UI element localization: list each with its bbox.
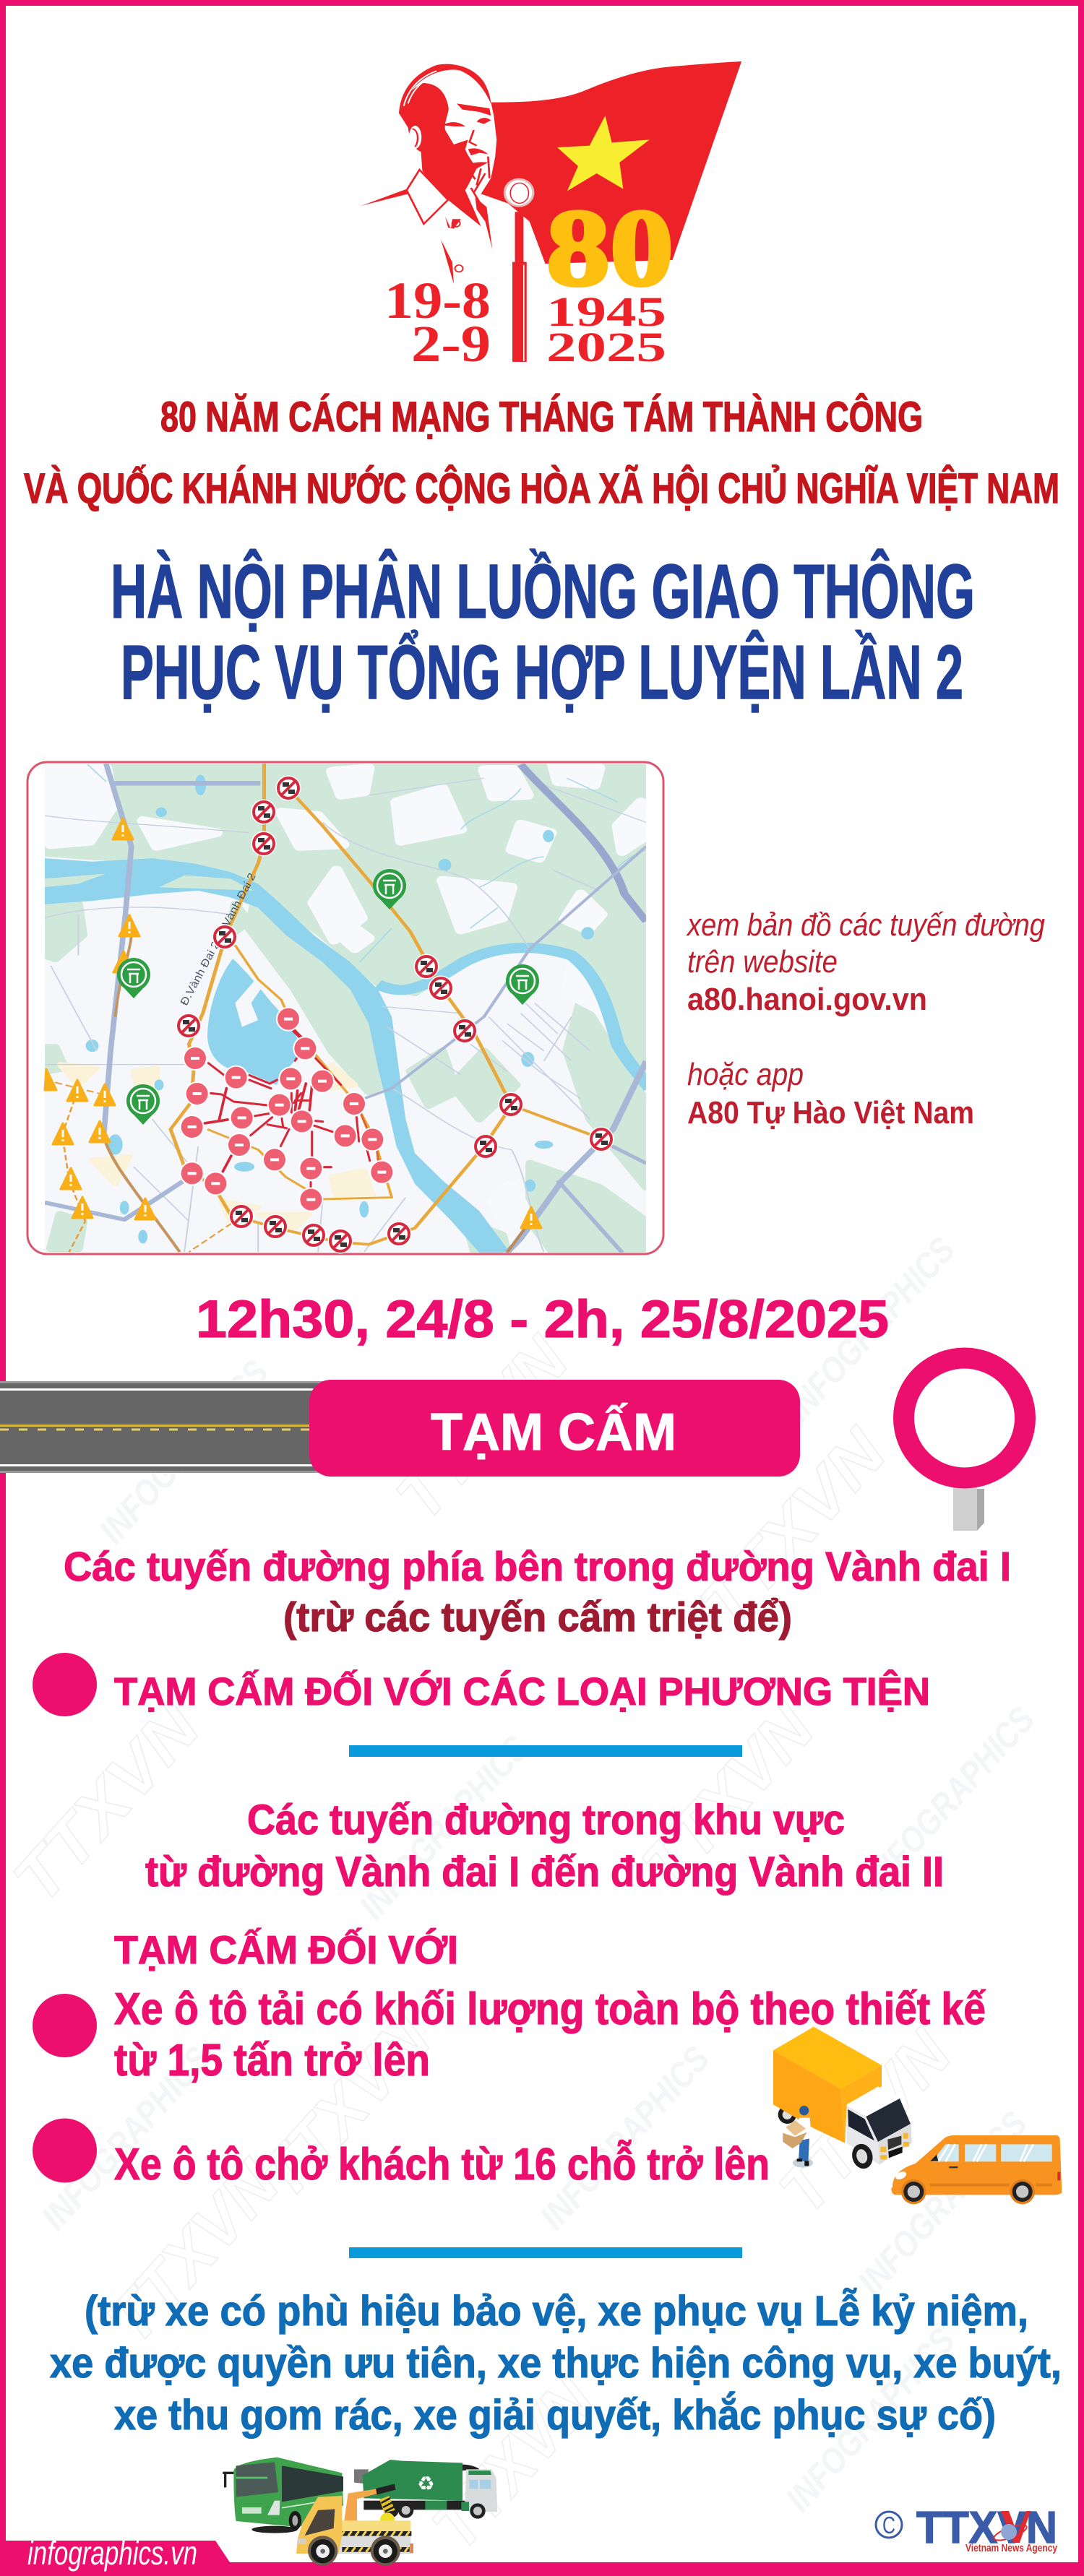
west lake: [207, 959, 304, 1085]
icon: recycle: ♻: [417, 2473, 435, 2495]
section 2 heading: [145, 1797, 944, 1896]
map base: [45, 764, 650, 1253]
years right: 2025: [546, 324, 666, 371]
icon: no-entry road sign: [903, 1358, 1025, 1531]
portrait: [361, 64, 492, 284]
van: [891, 2135, 1062, 2204]
no-entry markers: [180, 1007, 394, 1212]
garbage truck: [354, 2460, 497, 2519]
time range: 12h30, 24/8 - 2h, 25/8/2025: [196, 1290, 889, 1349]
panel: route map: [27, 762, 663, 1254]
exceptions text: [50, 2288, 1062, 2439]
ponds: [86, 774, 594, 1243]
text: TTXVN: [418, 2362, 610, 2563]
thin water lines: [87, 764, 646, 962]
section 2 heading: Các tuyến đường trong khu vực: [247, 1797, 845, 1844]
bottom strip and source tab: infographics.vn: [27, 2534, 197, 2572]
star: [557, 116, 650, 191]
bottom strip and source tab: [0, 2534, 1084, 2576]
text: TTXVN: [765, 2015, 966, 2227]
agency wordmark: TTXVN: [916, 2503, 1057, 2553]
text block: map website and app: [686, 907, 1045, 1131]
green location pins: [117, 869, 539, 1125]
road illustration: [0, 1381, 340, 1473]
divider bar: [349, 1745, 742, 1757]
blue-grey roads: [45, 764, 646, 1253]
heading: anniversary title: [24, 394, 1059, 512]
bullet: buses: [33, 2118, 770, 2190]
text: INFOGRAPHICS: [778, 2320, 963, 2519]
logo: TTXVN Vietnam News Agency: [876, 2503, 1058, 2554]
text: TTXVN: [245, 2001, 446, 2213]
agency tagline: Vietnam News Agency: [965, 2542, 1058, 2554]
section 1 heading: (trừ các tuyến cấm triệt để): [283, 1594, 792, 1641]
closed-road red lines: [205, 1031, 378, 1187]
icon: flag and portrait: [361, 61, 741, 362]
warning triangles: [45, 818, 541, 1228]
text: INFOGRAPHICS: [533, 2039, 717, 2237]
text: INFOGRAPHICS: [858, 1699, 1042, 1898]
map label: Đ.Vành Đai 2 Đ. Vành Đai 2: [178, 871, 259, 1008]
illustration: bus, garbage truck and tow truck: [223, 2458, 497, 2566]
banner: temporary ban: [309, 1380, 800, 1477]
bus: [223, 2458, 343, 2533]
text: TTXVN: [93, 2145, 294, 2357]
text: INFOGRAPHICS: [778, 1229, 963, 1428]
worker: [783, 2106, 813, 2168]
flag: [481, 61, 741, 264]
ring roads: [45, 764, 604, 1253]
text: INFOGRAPHICS: [34, 2039, 218, 2237]
text: TTXVN: [686, 1414, 902, 1642]
dates left: 2-9: [411, 315, 491, 373]
text: TTXVN: [382, 1322, 583, 1534]
copyright symbol: C: [882, 2512, 895, 2538]
illustration: truck, worker and van: [773, 2027, 1062, 2204]
text block: map website and app: a80.hanoi.gov.vn: [687, 982, 927, 1017]
text: INFOGRAPHICS: [352, 1728, 536, 1927]
banner: temporary ban: TẠM CẤM: [431, 1403, 676, 1461]
grey roads: [45, 778, 646, 1252]
text: INFOGRAPHICS: [92, 1352, 276, 1551]
exceptions text: xe thu gom rác, xe giải quyết, khắc phục sự cố): [114, 2392, 996, 2439]
divider bar: [349, 2247, 742, 2258]
years right: [546, 288, 666, 371]
tow truck: [296, 2484, 413, 2566]
microphone: [504, 179, 533, 206]
text block: map website and app: trên website: [687, 944, 838, 980]
heading: main title: [111, 548, 975, 715]
dates left: [384, 272, 491, 373]
bullet: ban on all vehicles: TẠM CẤM ĐỐI VỚI CÁC LOẠI PHƯƠNG TIỆN: [114, 1669, 930, 1713]
text block: map website and app: A80 Tự Hào Việt Nam: [687, 1095, 974, 1131]
bullet: trucks: Xe ô tô tải có khối lượng toàn bộ theo thiết kế: [114, 1984, 986, 2034]
no-truck markers: [177, 777, 613, 1253]
number 80: 80: [546, 187, 674, 308]
text: TTXVN: [628, 1690, 829, 1902]
years right: 1945: [546, 288, 666, 335]
bullet: ban on all vehicles: [33, 1653, 930, 1716]
section 2 heading: từ đường Vành đai I đến đường Vành đai II: [145, 1849, 944, 1896]
bullet: buses: Xe ô tô chở khách từ 16 chỗ trở lên: [114, 2140, 770, 2190]
logo: 80 years anniversary emblem: [361, 61, 741, 373]
dates left: 19-8: [384, 272, 491, 329]
subheading: banned for: TẠM CẤM ĐỐI VỚI: [114, 1927, 458, 1972]
text: INFOGRAPHICS: [851, 2104, 1035, 2302]
section 1 heading: Các tuyến đường phía bên trong đường Vành đai I: [64, 1544, 1011, 1590]
text block: map website and app: hoặc app: [687, 1057, 804, 1092]
copyright symbol: [876, 2512, 902, 2538]
section 1 heading: [64, 1544, 1011, 1641]
bullet: trucks: từ 1,5 tấn trở lên: [114, 2036, 430, 2086]
text: TTXVN: [0, 1689, 215, 1916]
red V and globe: [992, 2511, 1031, 2543]
rivers: [45, 858, 507, 1253]
bullet: trucks: [33, 1984, 986, 2086]
exceptions text: (trừ xe có phù hiệu bảo vệ, xe phục vụ Lễ kỷ niệm,: [85, 2288, 1028, 2335]
truck: [773, 2027, 912, 2171]
